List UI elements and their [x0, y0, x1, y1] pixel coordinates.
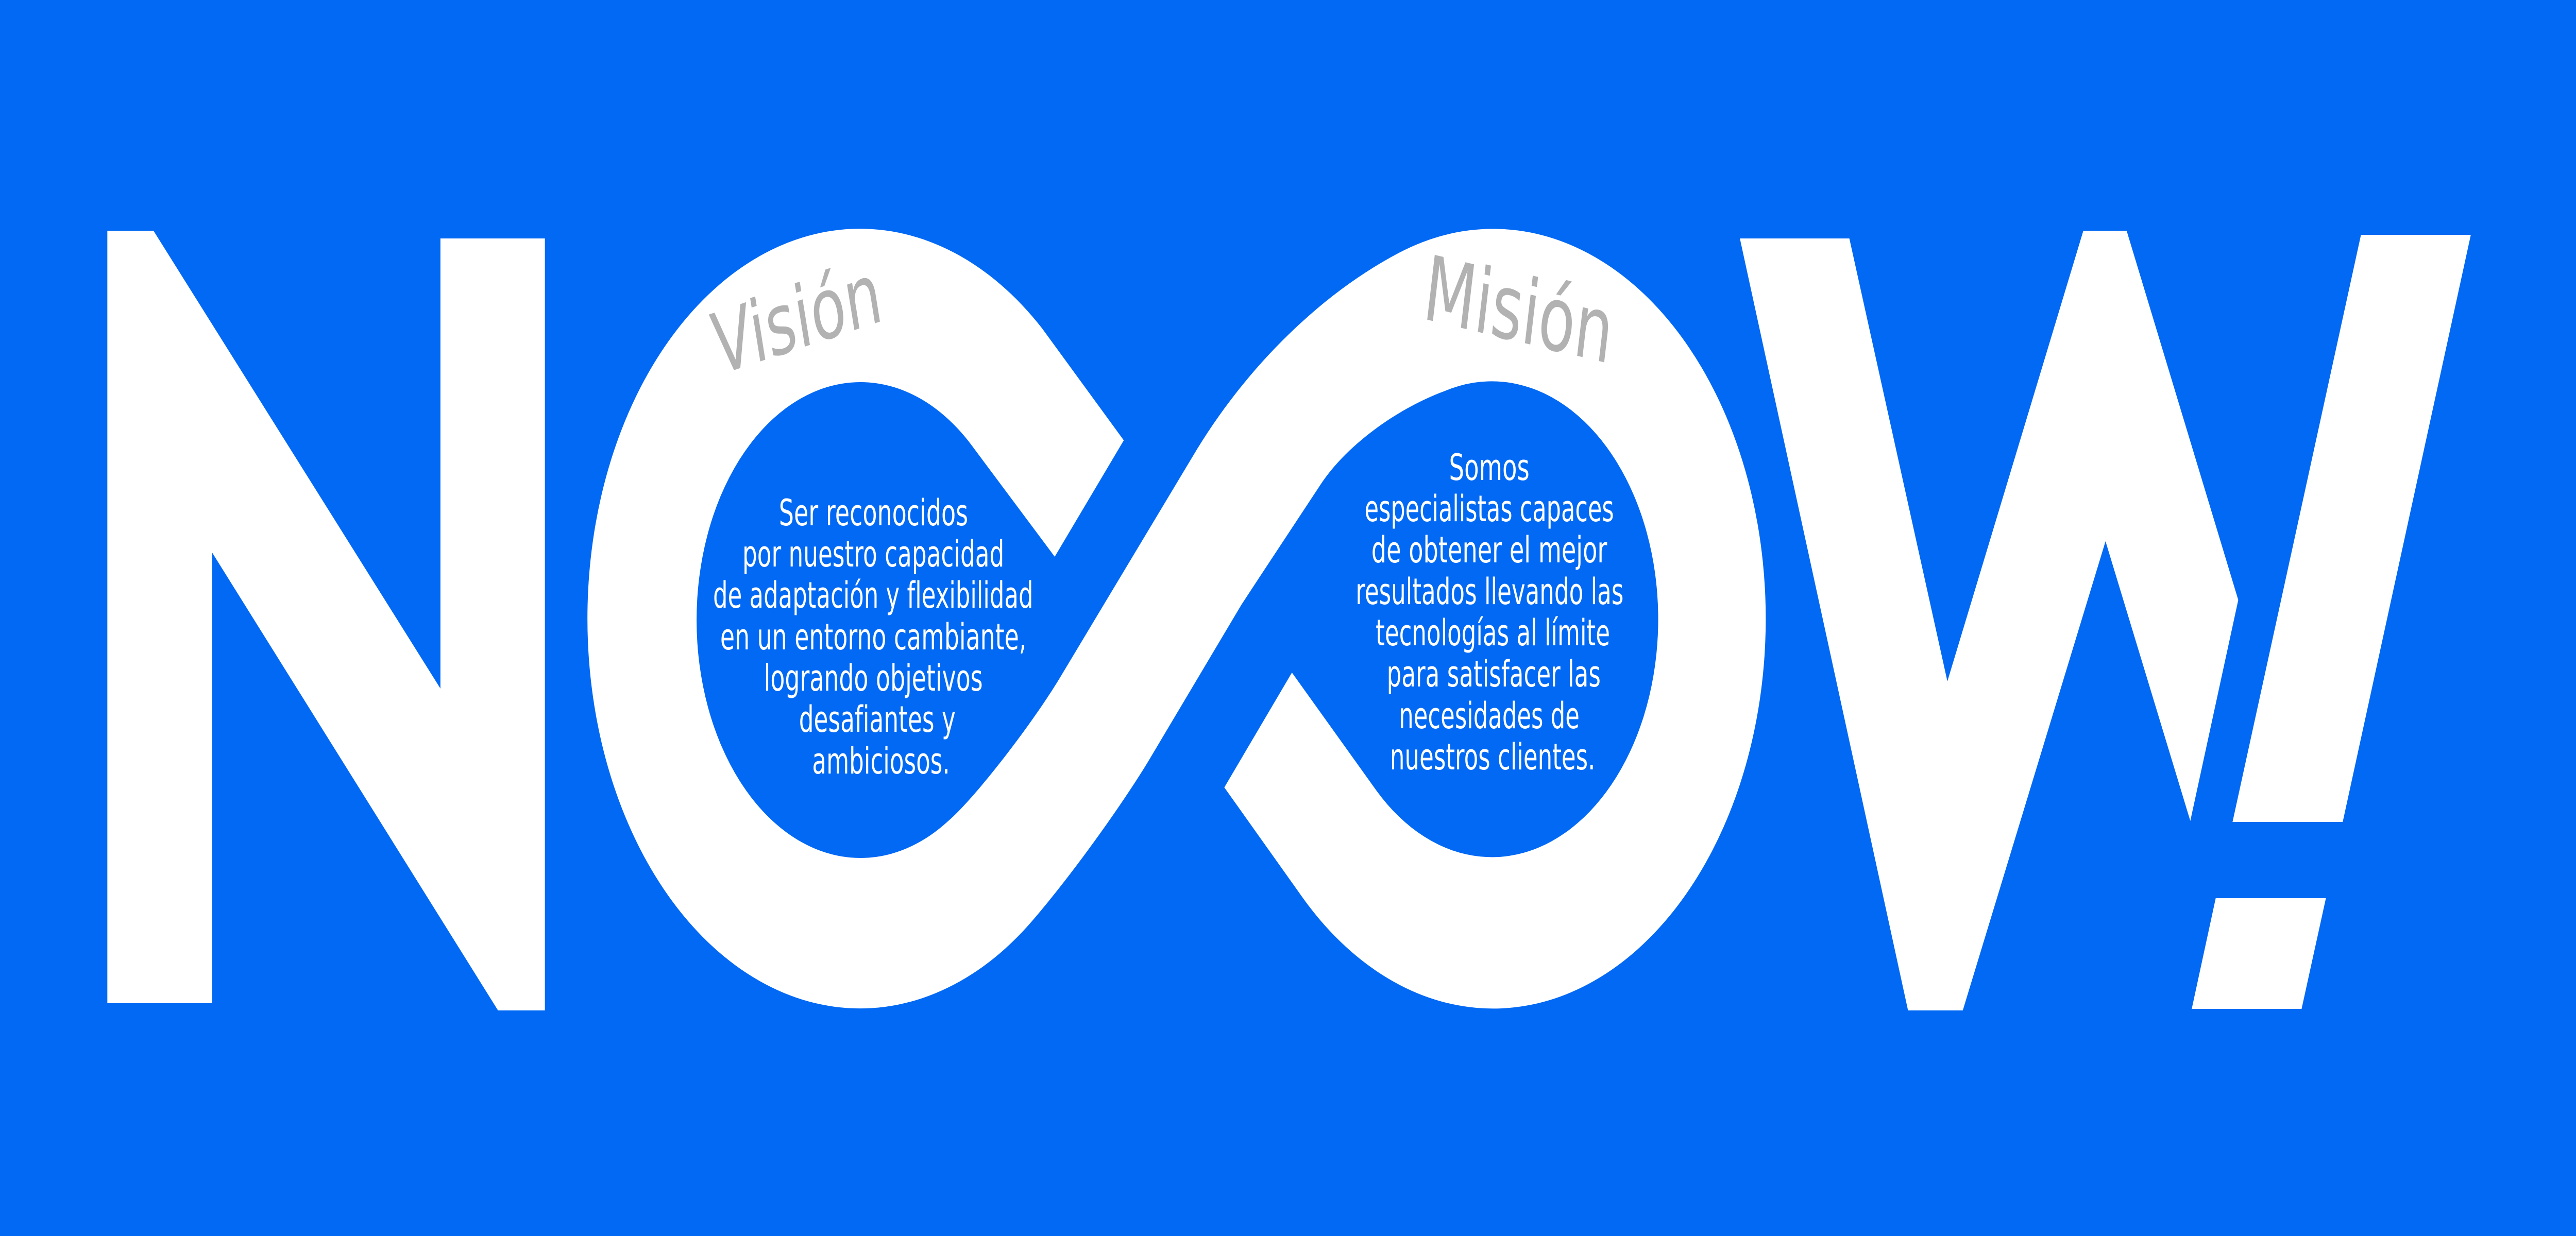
- infinity ribbon forming the letter O: [587, 229, 1766, 1008]
- letter N: [107, 231, 545, 1010]
- text block: vision statement: ambiciosos.: [812, 741, 950, 782]
- text block: mission statement: nuestros clientes.: [1390, 736, 1596, 778]
- text block: vision statement: logrando objetivos: [764, 658, 983, 699]
- heading: Visión: Visión: [706, 243, 888, 395]
- text block: mission statement: de obtener el mejor: [1371, 529, 1607, 571]
- text block: mission statement: [1355, 447, 1623, 778]
- text block: mission statement: tecnologías al límite: [1376, 612, 1610, 654]
- text block: mission statement: resultados llevando las: [1355, 571, 1623, 613]
- text block: vision statement: desafiantes y: [799, 699, 956, 741]
- text block: mission statement: Somos: [1449, 447, 1530, 489]
- heading: Misión: Misión: [1419, 236, 1619, 385]
- text block: mission statement: para satisfacer las: [1387, 654, 1601, 695]
- text block: vision statement: [713, 492, 1033, 782]
- exclamation mark: [2192, 235, 2471, 1009]
- text block: vision statement: de adaptación y flexibilidad: [713, 575, 1033, 616]
- text block: vision statement: Ser reconocidos: [779, 492, 968, 534]
- text block: vision statement: en un entorno cambiante,: [720, 616, 1026, 658]
- text block: mission statement: necesidades de: [1399, 695, 1580, 737]
- text block: mission statement: especialistas capaces: [1365, 488, 1614, 530]
- letter W: [1740, 231, 2238, 1010]
- text block: vision statement: por nuestro capacidad: [742, 534, 1004, 575]
